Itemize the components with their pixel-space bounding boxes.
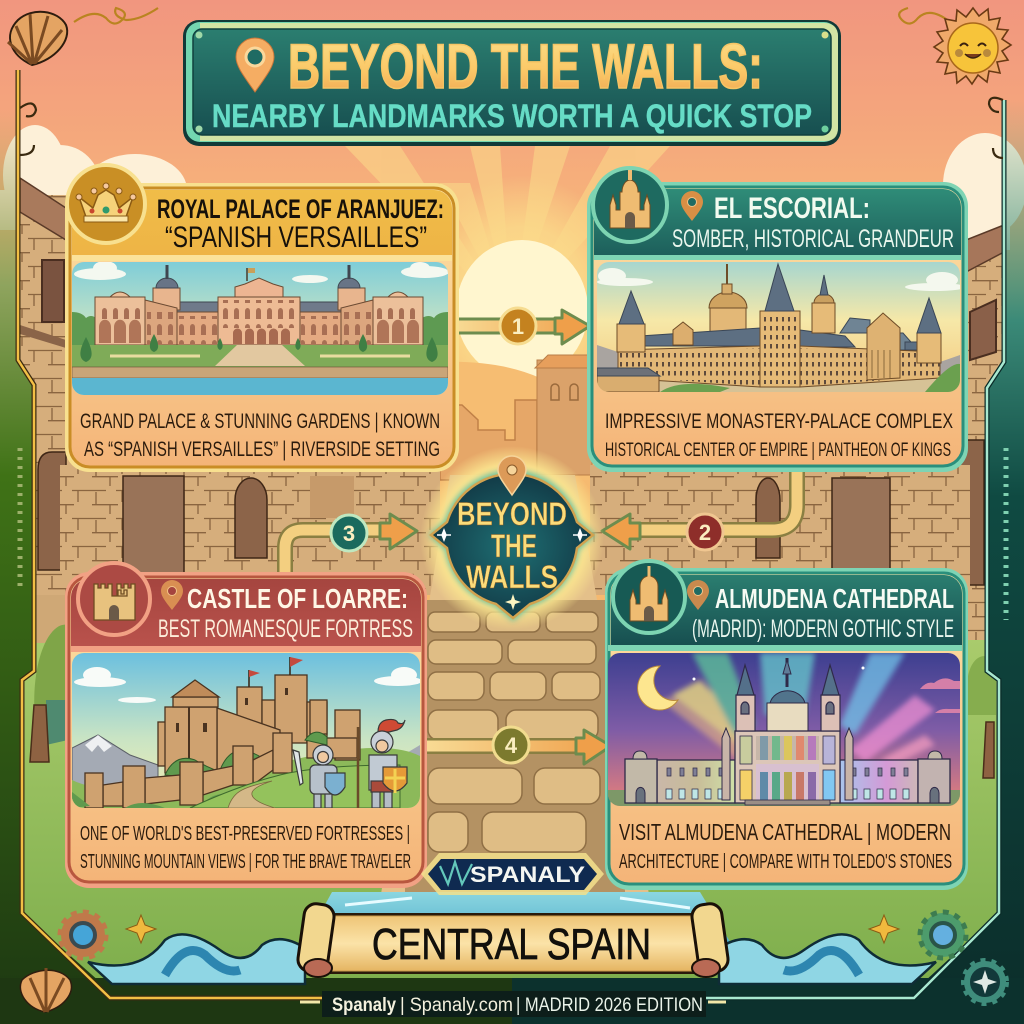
panel description: AS “SPANISH VERSAILLES” | RIVERSIDE SETTING [84,438,440,461]
icon: scallop shell top-left [8,12,67,65]
icon: heading pin [161,580,183,610]
belfry [812,303,835,333]
waves and gears [60,912,966,984]
logo badge: Spanaly [421,853,604,895]
gable and facade [673,322,693,345]
icon: gear emblem bottom-right [963,960,1007,1004]
footer credit [300,991,726,1017]
central tower [760,311,800,387]
arrow 1 [452,308,590,344]
title text: BEYOND THE WALLS: [288,32,763,102]
arrow 1: 1 [512,314,524,339]
panel description: GRAND PALACE & STUNNING GARDENS | KNOWN [80,410,440,433]
right tower [917,333,941,363]
icon: heading pin [687,580,709,610]
arrow 3: 3 [343,521,355,546]
icon: location pin [236,38,274,92]
badge text: BEYOND [457,496,567,532]
arrow 3 [285,514,417,575]
title panel [183,20,841,146]
logo badge: Spanaly: SPANALY [470,862,585,887]
illustration: castle and knights [72,653,422,808]
panel heading: CASTLE OF LOARRE: [187,583,408,614]
foreground building [597,376,659,392]
icon: badge pin [498,456,526,495]
central dome [767,658,808,731]
footer credit: Spanaly [332,995,396,1016]
centre facade [735,731,840,803]
icon: heading pin [681,191,703,221]
tree left [30,625,68,762]
panel heading: EL ESCORIAL: [714,192,870,225]
icon: smiling sun top-right [934,8,1011,84]
tree right [967,656,996,778]
arrow 2: 2 [699,520,711,545]
scroll banner: Central Spain: CENTRAL SPAIN [372,920,651,969]
footer credit: | MADRID 2026 EDITION [516,995,703,1016]
main body [618,346,940,387]
panel description [605,410,953,461]
illustration: monastery [597,262,965,392]
panel heading: ROYAL PALACE OF ARANJUEZ: [157,194,444,224]
subtitle text: NEARBY LANDMARKS WORTH A QUICK STOP [212,98,812,134]
centre badge [420,446,604,630]
left tower [617,324,645,352]
badge text: WALLS [466,559,558,595]
panel description [80,410,440,461]
panel: Castle of Loarre [65,563,427,888]
badge text [457,496,567,595]
panel: Royal Palace of Aranjuez [65,165,459,472]
panel description [80,823,411,873]
panel description: ONE OF WORLD'S BEST-PRESERVED FORTRESSES | [80,823,410,845]
towers [736,665,840,731]
arrow 4: 4 [505,733,518,758]
panel subheading: BEST ROMANESQUE FORTRESS [158,615,413,643]
panel description [619,819,952,873]
arrow 2 [602,468,797,550]
panel: El Escorial [587,168,968,472]
icon: cathedral badge [613,561,685,633]
panel: Almudena Cathedral [605,561,968,890]
icon: monastery badge [593,168,667,242]
illustration: palace and gardens [72,261,449,395]
slate roofs [632,328,760,346]
side wings [657,760,735,803]
icon: crown badge [67,165,145,243]
illustration: illuminated cathedral [608,653,960,806]
panel description: STUNNING MOUNTAIN VIEWS | FOR THE BRAVE TRAVELER [80,851,411,873]
knight right [358,719,407,808]
footer credit: | Spanaly.com [400,995,513,1016]
arrow 4 [422,727,611,764]
panel subheading: “SPANISH VERSAILLES” [165,221,427,254]
icon: castle badge [78,563,150,635]
badge text: THE [491,528,537,564]
distant tower [535,355,592,475]
scroll banner: Central Spain [296,902,730,977]
knight left [293,745,345,808]
dome [709,264,747,337]
icon: scallop shell bottom-left [20,968,71,1012]
